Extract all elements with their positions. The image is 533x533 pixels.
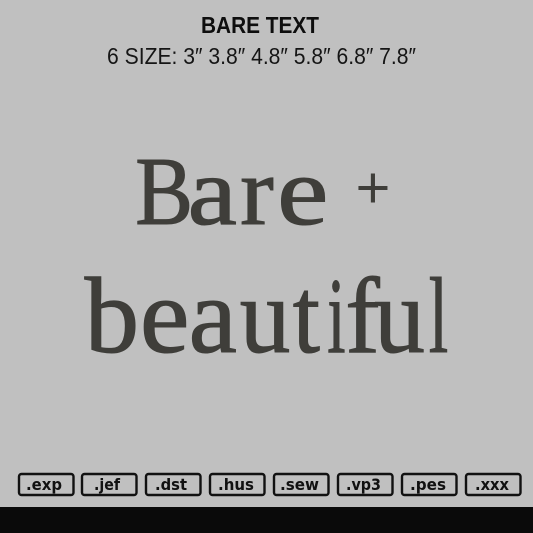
badge: dst: .dst [155, 475, 187, 494]
badge: xxx: .xxx [475, 475, 510, 494]
badge: dst [146, 474, 200, 495]
badge: vp3: .vp3 [346, 475, 381, 494]
badge: pes [402, 474, 456, 495]
badge: xxx [466, 474, 520, 495]
badge: jef: .jef [94, 475, 121, 494]
embroidered text: beautiful: e [140, 257, 189, 376]
badge: sew [274, 474, 328, 495]
embroidered text: Bare +: e [277, 138, 328, 245]
embroidered text: Bare + [135, 138, 390, 245]
file format badges [19, 474, 520, 495]
badge: hus: .hus [218, 475, 254, 494]
bottom black bar [0, 507, 533, 533]
embroidered text: beautiful: i [327, 257, 346, 376]
size list: 6 SIZE: 3″ 3.8″ 4.8″ 5.8″ 6.8″ 7.8″ [107, 43, 416, 69]
badge: exp [19, 474, 74, 495]
badge: jef [82, 474, 136, 495]
embroidered text: beautiful: a [189, 257, 237, 376]
embroidered text: Bare +: r [240, 138, 274, 245]
badge: sew: .sew [280, 475, 319, 494]
badge: hus [210, 474, 264, 495]
embroidered text: Bare +: a [188, 138, 237, 245]
embroidered text: beautiful: t [293, 257, 320, 376]
badge: exp: .exp [26, 475, 62, 494]
embroidered text: Bare +: + [356, 155, 390, 221]
embroidered text: beautiful: u [374, 257, 425, 376]
badge: vp3 [338, 474, 392, 495]
badge: pes: .pes [410, 475, 446, 494]
title: BARE TEXT [201, 12, 320, 38]
embroidered text: beautiful: f [345, 257, 380, 376]
embroidered text: Bare +: B [135, 138, 193, 245]
embroidered text: beautiful: l [429, 257, 448, 376]
embroidered text: beautiful: b [85, 257, 139, 376]
embroidered text: beautiful: u [240, 257, 290, 376]
